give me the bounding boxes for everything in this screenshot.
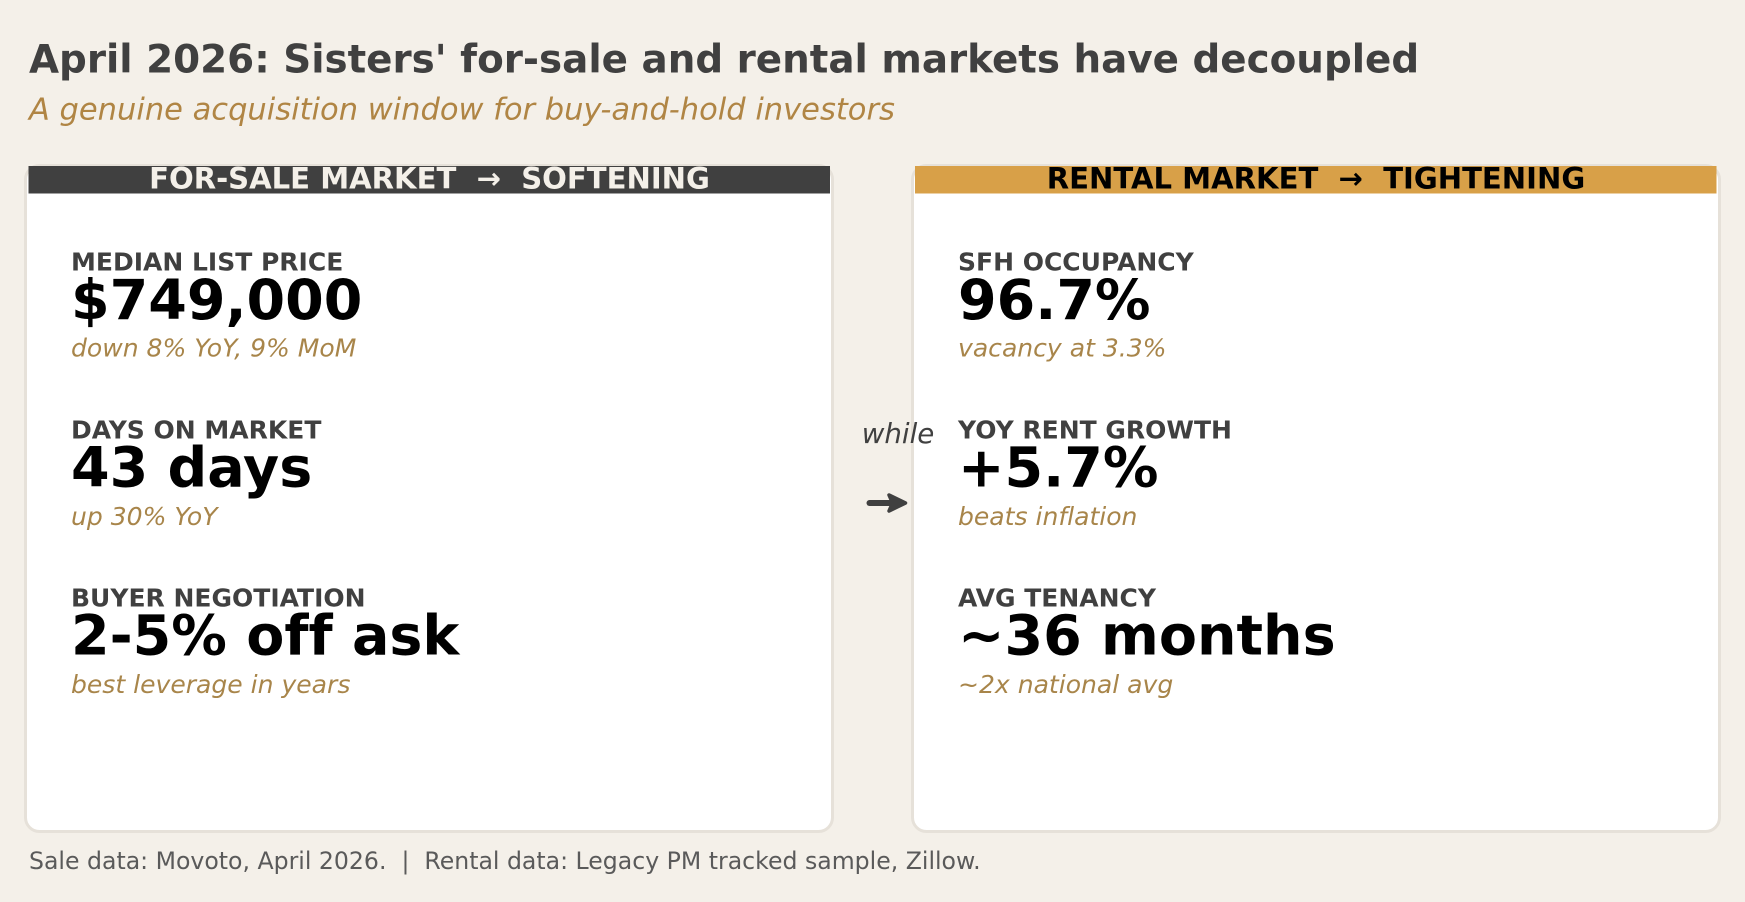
metric: sfh occupancy: 96.7%	[958, 268, 1151, 333]
connector label: while: while	[862, 417, 934, 450]
metric: sfh occupancy: vacancy at 3.3%	[958, 334, 1166, 362]
metric: days on market: DAYS ON MARKET	[71, 416, 321, 444]
metric: yoy rent growth: YOY RENT GROWTH	[957, 416, 1232, 444]
panel header: rental market: RENTAL MARKET → TIGHTENING	[1047, 162, 1585, 196]
panel header: for-sale market	[28, 162, 830, 196]
metric: sfh occupancy	[958, 248, 1195, 362]
metric: avg tenancy: ~36 months	[958, 604, 1336, 668]
panel: rental market	[912, 162, 1720, 832]
panel: for-sale market	[26, 162, 832, 832]
metric: avg tenancy: AVG TENANCY	[958, 584, 1157, 612]
metric: median list price: down 8% YoY, 9% MoM	[71, 334, 356, 362]
title: April 2026: Sisters' for-sale and rental markets have decoupled	[29, 38, 1419, 82]
metric: median list price	[71, 248, 362, 362]
metric: days on market: up 30% YoY	[71, 502, 219, 531]
footer source note: Sale data: Movoto, April 2026. | Rental data: Legacy PM tracked sample, Zillow.	[29, 847, 981, 875]
panel header: for-sale market: FOR-SALE MARKET → SOFTENING	[149, 162, 710, 196]
metric: yoy rent growth: +5.7%	[958, 436, 1158, 500]
arrow: for-sale to rental	[870, 495, 906, 511]
metric: buyer negotiation	[71, 584, 460, 699]
metric: buyer negotiation: 2-5% off ask	[71, 604, 460, 668]
metric: days on market	[71, 416, 321, 531]
metric: buyer negotiation: BUYER NEGOTIATION	[71, 584, 366, 612]
subtitle: A genuine acquisition window for buy-and-hold investors	[27, 92, 895, 128]
metric: yoy rent growth	[957, 416, 1232, 531]
metric: yoy rent growth: beats inflation	[958, 502, 1137, 531]
panel header: rental market	[915, 162, 1716, 196]
metric: median list price: $749,000	[71, 268, 362, 333]
metric: avg tenancy	[958, 584, 1336, 699]
metric: sfh occupancy: SFH OCCUPANCY	[958, 248, 1195, 276]
metric: buyer negotiation: best leverage in years	[71, 670, 350, 699]
metric: avg tenancy: ~2x national avg	[958, 670, 1173, 699]
metric: median list price: MEDIAN LIST PRICE	[71, 248, 343, 276]
metric: days on market: 43 days	[71, 436, 312, 500]
